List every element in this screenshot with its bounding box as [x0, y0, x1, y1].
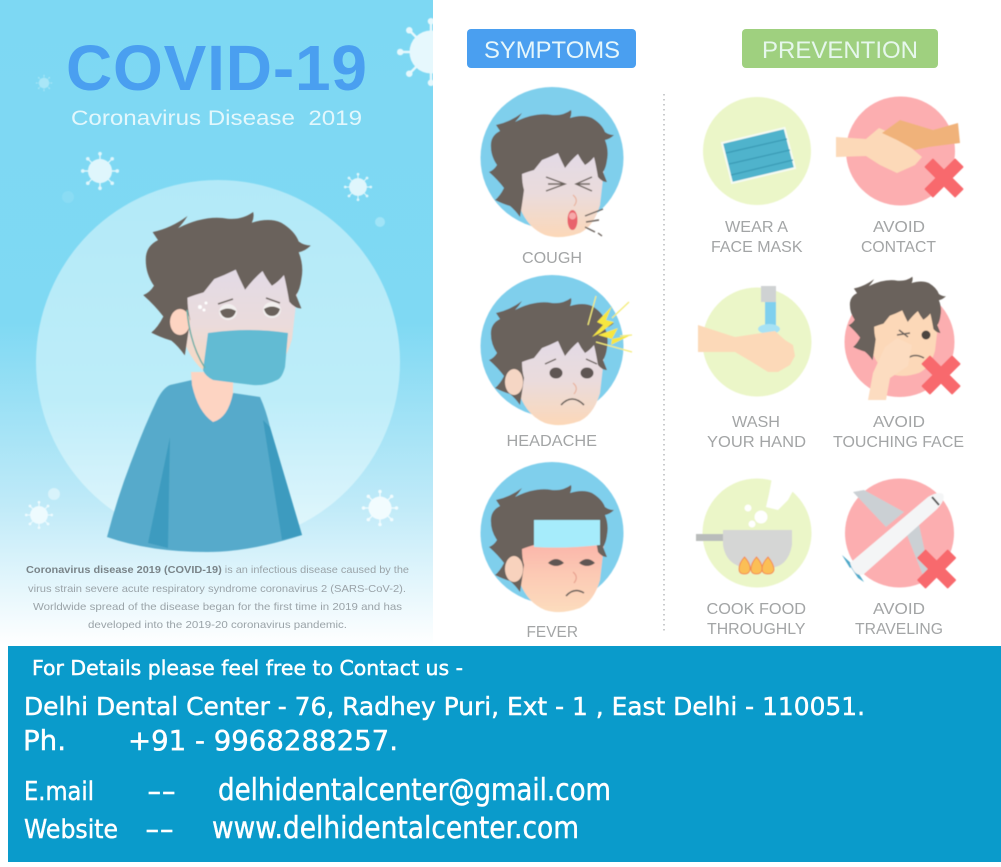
- character wearing a face mask: [107, 212, 311, 552]
- label: wash your hand: YOUR HAND: [707, 434, 806, 451]
- head: [186, 269, 298, 370]
- description paragraph: developed into the 2019-20 coronavirus pandemic.: [88, 619, 347, 631]
- symptoms heading: [467, 29, 636, 68]
- label: avoid contact: AVOID: [873, 219, 925, 236]
- face mask: [203, 330, 288, 385]
- website: www.delhidentalcenter.com: [212, 811, 579, 846]
- shirt folds: [148, 420, 302, 548]
- label: cough: COUGH: [522, 250, 582, 267]
- description paragraph: virus strain severe acute respiratory syndrome coronavirus 2 (SARS-CoV-2).: [28, 583, 406, 595]
- icon: cook food: [696, 478, 812, 588]
- icon: headache: [480, 275, 632, 425]
- icon: fever: [480, 462, 624, 612]
- phone: Ph.: [23, 724, 66, 757]
- panel: covid-19 poster: [0, 0, 465, 646]
- title: COVID-19: [66, 32, 367, 104]
- label: wear a face mask: [711, 219, 803, 256]
- description paragraph: Worldwide spread of the disease began for the first time in 2019 and has: [33, 601, 402, 613]
- email: --: [147, 777, 176, 807]
- address: Delhi Dental Center - 76, Radhey Puri, Ext - 1 , East Delhi - 110051.: [24, 692, 865, 721]
- sweat marks: [198, 302, 208, 312]
- label: avoid traveling: AVOID: [873, 601, 925, 618]
- label: headache: HEADACHE: [506, 433, 597, 450]
- contact intro: For Details please feel free to Contact us -: [32, 656, 463, 680]
- shirt: [107, 380, 302, 552]
- subtitle: Coronavirus Disease 2019: [71, 107, 362, 130]
- website: --: [145, 815, 174, 845]
- description paragraph: [26, 564, 409, 631]
- icon: avoid touching face: [844, 277, 961, 400]
- icon: face mask: [703, 97, 811, 205]
- icon: avoid contact: [836, 96, 964, 206]
- label: avoid traveling: [855, 601, 943, 638]
- prevention heading: PREVENTION: [762, 37, 918, 64]
- label: avoid contact: CONTACT: [861, 239, 936, 256]
- website: [24, 811, 579, 846]
- description paragraph: Coronavirus disease 2019 (COVID-19) is an infectious disease caused by the: [26, 564, 409, 576]
- panel: symptoms: [467, 29, 636, 641]
- icon: avoid traveling: [842, 478, 956, 589]
- icon: cough: [480, 87, 624, 237]
- hair: [143, 212, 311, 355]
- divider between symptoms and prevention: [663, 94, 665, 632]
- label: avoid touching face: [833, 414, 964, 451]
- label: avoid touching face: AVOID: [873, 414, 925, 431]
- mask ear loop: [187, 310, 205, 368]
- prevention heading: [742, 29, 938, 68]
- halo circle behind character: [36, 180, 400, 544]
- email: [24, 773, 611, 808]
- website: Website: [24, 815, 118, 845]
- label: avoid traveling: TRAVELING: [855, 621, 943, 638]
- icons: floating virus particles: [25, 18, 465, 529]
- panel: prevention: [696, 29, 964, 638]
- label: cook food throughly: [706, 601, 806, 638]
- email: E.mail: [24, 777, 94, 807]
- phone: +91 - 9968288257.: [128, 724, 398, 757]
- label: wash your hand: WASH: [732, 414, 780, 431]
- panel: contact details banner: [8, 646, 1001, 862]
- eyes: [218, 298, 281, 320]
- icon: wash hands: [698, 286, 812, 396]
- label: wear a face mask: FACE MASK: [711, 239, 803, 256]
- label: avoid touching face: TOUCHING FACE: [833, 434, 964, 451]
- label: wash your hand: [707, 414, 806, 451]
- symptoms heading: SYMPTOMS: [484, 37, 620, 64]
- label: avoid contact: [861, 219, 936, 256]
- label: cook food throughly: THROUGHLY: [707, 621, 806, 638]
- email: delhidentalcenter@gmail.com: [218, 773, 611, 808]
- ear: [170, 309, 190, 335]
- label: fever: FEVER: [526, 624, 578, 641]
- neck: [191, 372, 233, 422]
- label: cook food throughly: COOK FOOD: [706, 601, 806, 618]
- label: wear a face mask: WEAR A: [725, 219, 788, 236]
